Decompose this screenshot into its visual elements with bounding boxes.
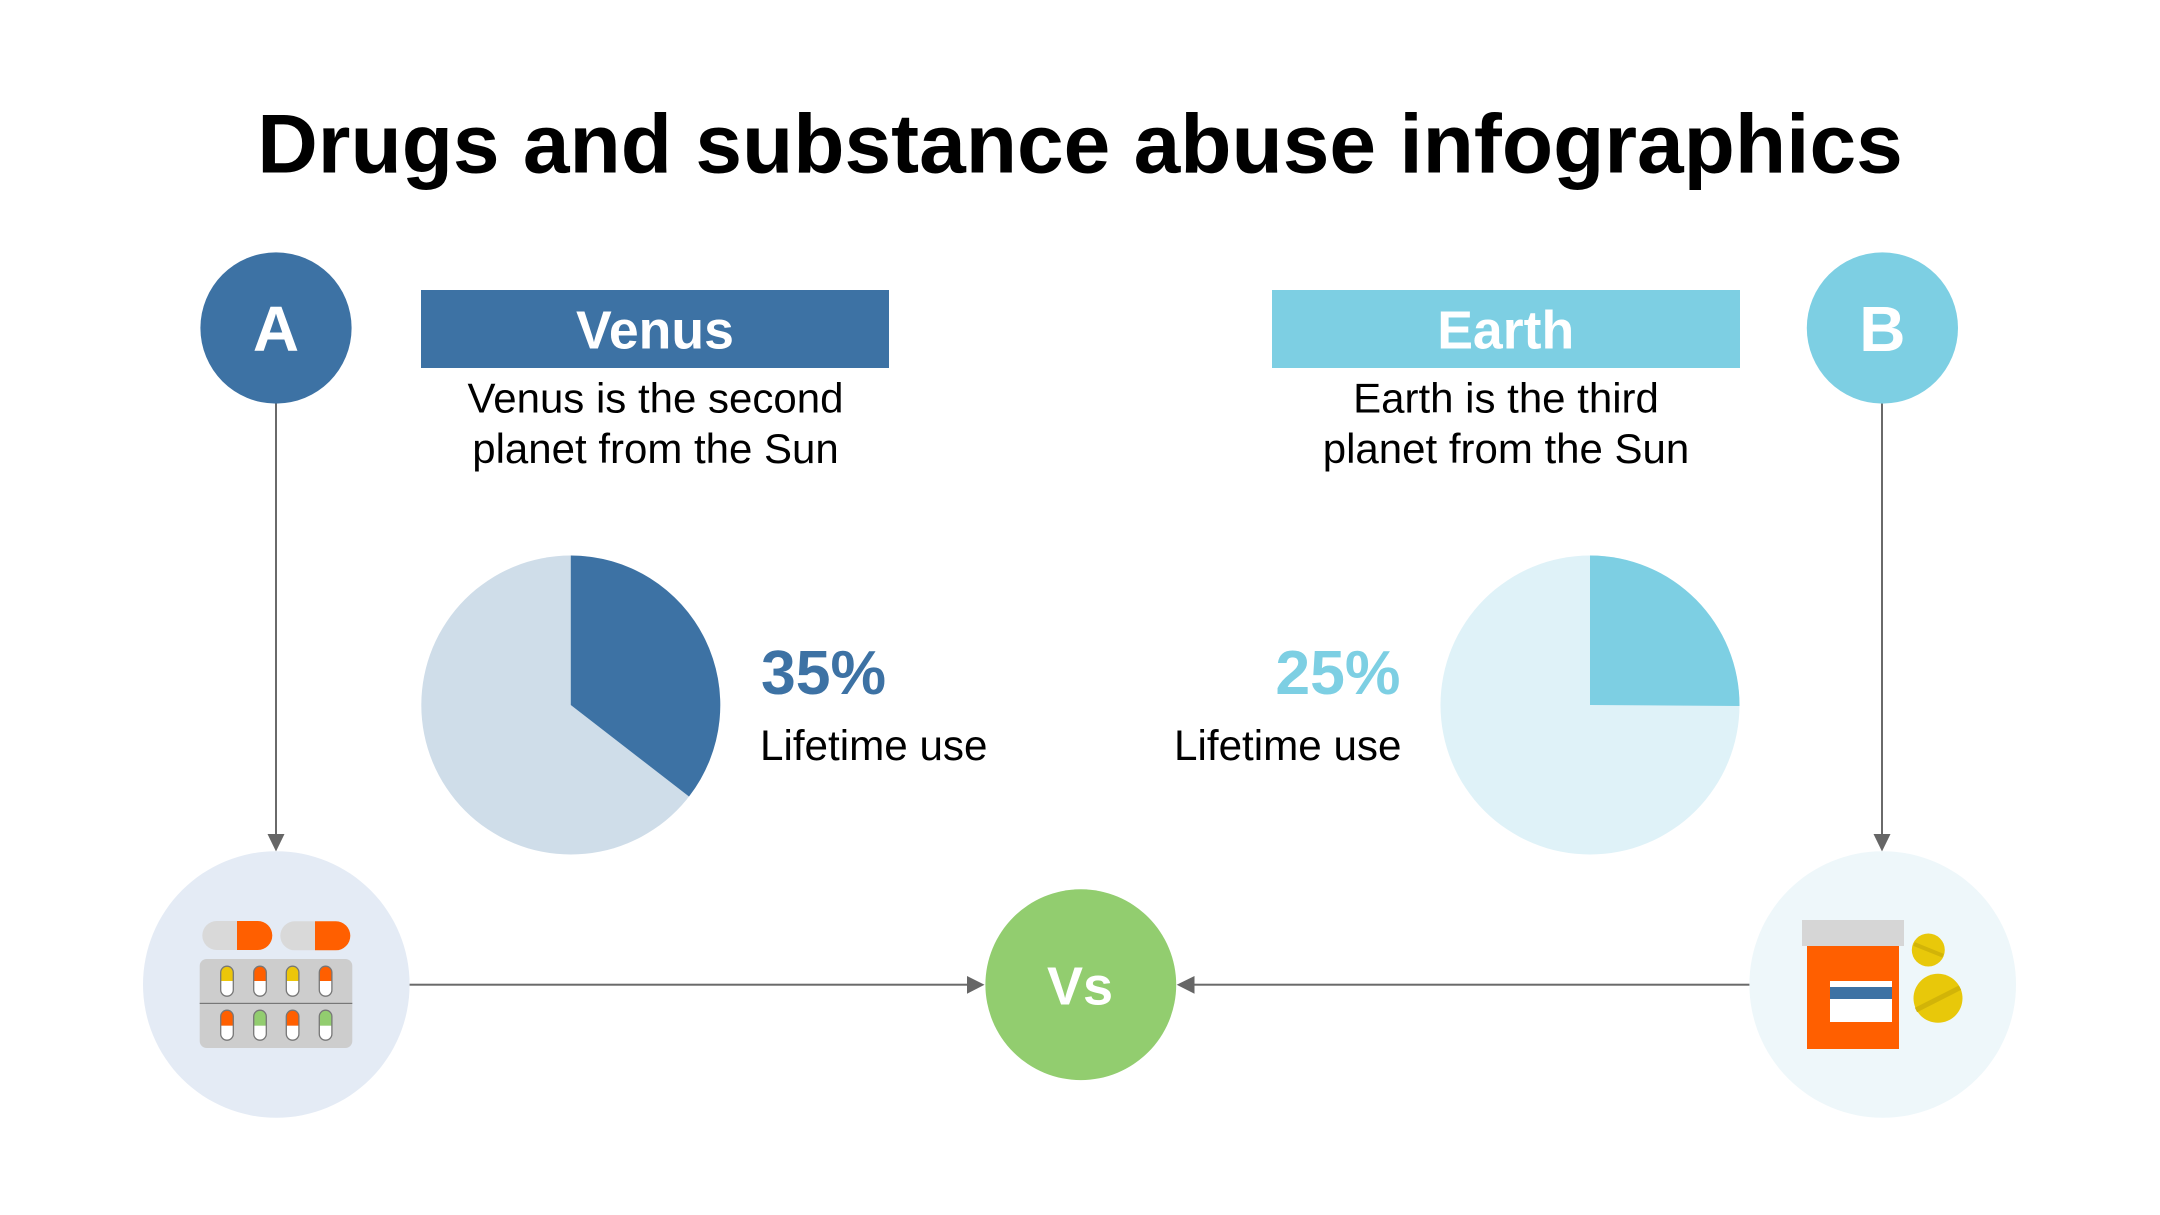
badge: Vs: [985, 889, 1176, 1080]
stat: 35% lifetime use: Lifetime use: [760, 722, 987, 769]
blister tray: [200, 959, 352, 1048]
arrow: pills icon to Vs: [409, 976, 984, 994]
badge: Vs: Vs: [1047, 957, 1113, 1017]
large tablet: [1914, 974, 1962, 1023]
capsule left: [202, 921, 272, 950]
panel: Venus heading: Venus: [576, 300, 734, 360]
badge A: A: [253, 293, 299, 365]
badge A: [200, 252, 352, 404]
text: Earth description: planet from the Sun: [1323, 425, 1689, 472]
arrow: A to pills icon: [268, 403, 284, 852]
pie chart: Venus 35%: [421, 556, 720, 854]
bottle: [1802, 920, 1904, 1049]
capsule right: [280, 921, 350, 950]
panel: Earth heading: [1272, 290, 1740, 368]
stat: 25% lifetime use: Lifetime use: [1174, 722, 1402, 769]
badge B: B: [1859, 293, 1906, 365]
pie chart: Earth 25%: [1440, 556, 1740, 854]
panel: Earth heading: Earth: [1437, 300, 1574, 360]
icon: pills and blister pack: [143, 851, 410, 1118]
text: Venus description: Venus is the second: [468, 374, 843, 422]
stat: 25% lifetime use: [1174, 638, 1402, 769]
text: Venus description: planet from the Sun: [472, 425, 839, 472]
arrow: B to bottle icon: [1874, 403, 1890, 852]
small tablet: [1912, 934, 1945, 966]
stat: 25% lifetime use: 25%: [1275, 638, 1400, 708]
badge B: [1807, 252, 1958, 404]
panel: Venus heading: [421, 290, 889, 368]
icon: pill bottle and tablets: [1749, 851, 2016, 1118]
stat: 35% lifetime use: 35%: [761, 638, 886, 708]
arrow: bottle icon to Vs: [1177, 976, 1750, 994]
text: Earth description: Earth is the third: [1353, 374, 1659, 422]
stat: 35% lifetime use: [760, 638, 987, 769]
title: Drugs and substance abuse infographics: [257, 97, 1903, 191]
